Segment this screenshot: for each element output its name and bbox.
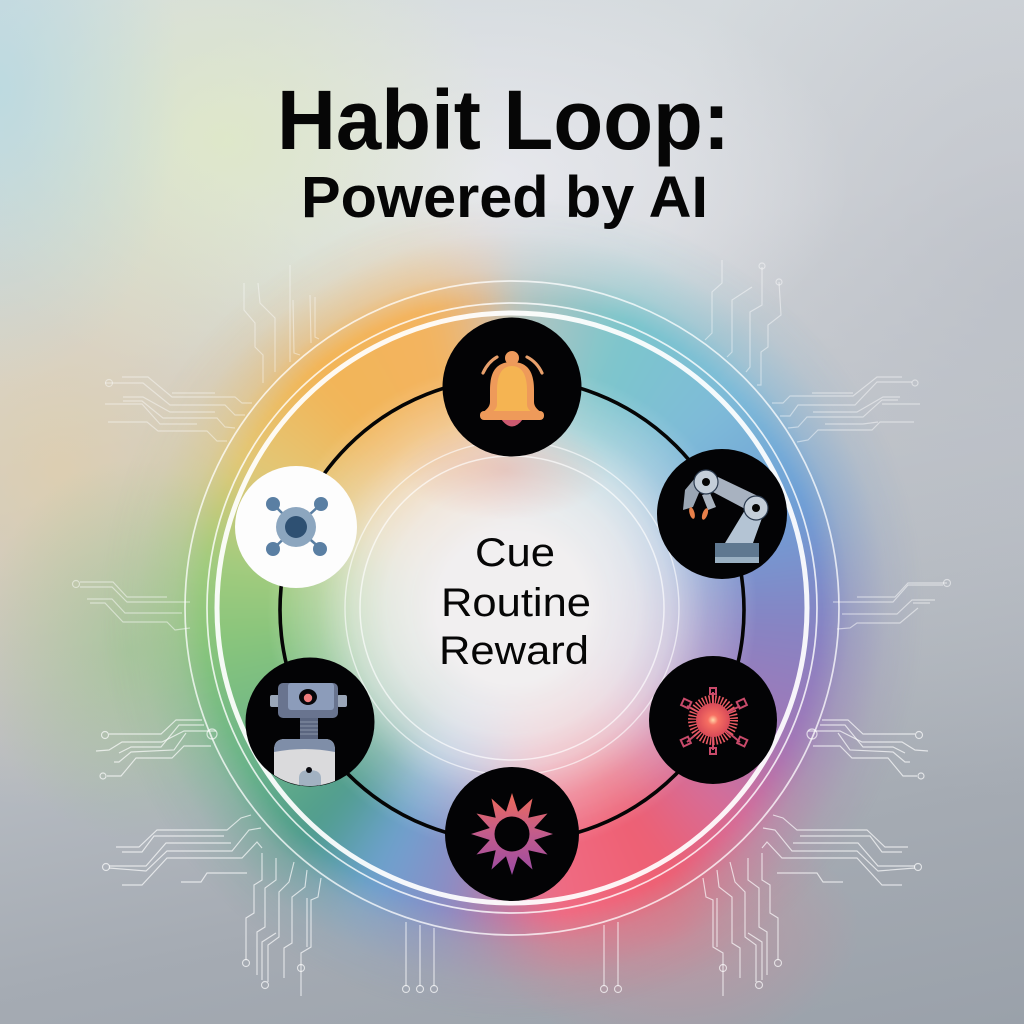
icon: neural burst xyxy=(681,688,747,754)
bell badge xyxy=(442,318,582,456)
circuit lower right xyxy=(600,720,928,996)
node: robotic arm xyxy=(657,449,787,579)
icon: network hub xyxy=(266,497,328,556)
circuit lower left xyxy=(96,720,438,996)
icon: robotic arm xyxy=(683,470,768,563)
circuit middle right xyxy=(833,580,950,629)
soft light core of loop xyxy=(232,328,792,888)
circuit upper left xyxy=(105,265,319,441)
thick white ring xyxy=(217,313,807,903)
outer thin ring xyxy=(185,281,839,935)
decorative concentric rings xyxy=(185,281,839,935)
title xyxy=(277,73,730,230)
node: red neural burst xyxy=(649,656,777,784)
inner ring large xyxy=(345,441,679,775)
title line 2: Powered by AI xyxy=(301,165,708,230)
arm badge xyxy=(657,449,787,579)
colour halo behind loop xyxy=(142,220,888,982)
circuit traces xyxy=(72,260,950,996)
node: sun burst xyxy=(445,767,579,901)
circuit middle left xyxy=(72,580,190,630)
circuit upper right xyxy=(705,260,920,442)
node: white network xyxy=(235,466,357,588)
black loop ring xyxy=(280,378,744,842)
node: robot xyxy=(246,658,374,790)
rose glow under bell badge xyxy=(400,420,610,520)
icon: robot xyxy=(270,683,347,790)
icon: bell xyxy=(480,351,544,426)
robot badge xyxy=(246,658,374,786)
inner ring small xyxy=(360,456,664,760)
burst badge xyxy=(649,656,777,784)
middle thin ring xyxy=(207,303,817,913)
center labels xyxy=(439,531,591,673)
network badge xyxy=(235,466,357,588)
icon: sun xyxy=(471,793,553,875)
label cue: Cue xyxy=(475,531,555,575)
title line 1: Habit Loop: xyxy=(277,73,730,167)
label routine: Routine xyxy=(441,581,591,625)
node: bell xyxy=(442,318,582,456)
sun badge xyxy=(445,767,579,901)
label reward: Reward xyxy=(439,629,589,673)
